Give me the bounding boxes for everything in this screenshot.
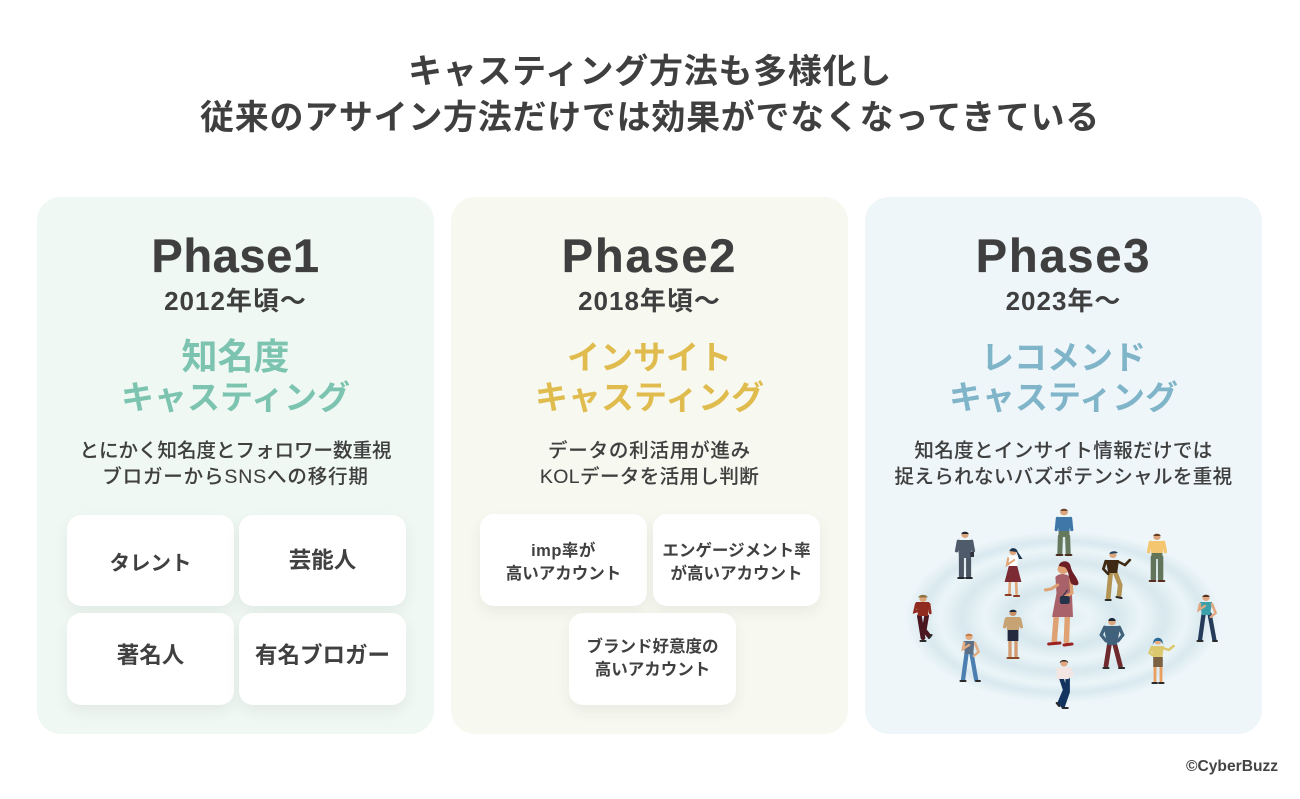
card: engagement rate: エンゲージメント率: [662, 542, 811, 560]
description: phase 1: とにかく知名度とフォロワー数重視: [79, 440, 392, 462]
card: brand favorability: 高いアカウント: [595, 661, 710, 679]
subheading: recommend casting: キャスティング: [949, 371, 1178, 419]
person: woman in red skirt: [1005, 548, 1023, 596]
heading: Phase3: Phase3: [976, 229, 1151, 282]
description: phase 3: 知名度とインサイト情報だけでは: [914, 440, 1213, 462]
subheading: insight casting: インサイト: [567, 331, 732, 379]
ripple rings: [905, 531, 1221, 703]
person: blue shirt: [1056, 509, 1072, 555]
description: phase 3: 捉えられないバズポテンシャルを重視: [895, 466, 1232, 488]
title: [200, 44, 1100, 139]
card: celebrity: 著名人: [117, 643, 184, 668]
person: teal shirt: [1198, 595, 1217, 641]
person: tan shirt and shorts: [1005, 610, 1021, 658]
title: キャスティング方法も多様化し: [408, 44, 892, 93]
person: white shirt navy pants: [1057, 660, 1072, 708]
subheading: insight casting: キャスティング: [535, 371, 764, 419]
heading: Phase2: Phase2: [562, 229, 737, 282]
description: phase 2: KOLデータを活用し判断: [540, 466, 759, 488]
subheading: fame casting: [121, 328, 350, 419]
card: entertainer: 芸能人: [289, 548, 356, 572]
description: phase 1: ブロガーからSNSへの移行期: [102, 466, 369, 488]
person: suit: [957, 532, 974, 578]
person: navy jacket maroon pants: [1101, 618, 1124, 668]
heading: Phase1: Phase1: [151, 229, 320, 282]
card: engagement rate: [653, 514, 820, 606]
card: engagement rate: が高いアカウント: [670, 564, 802, 582]
panel: Phase 1: [37, 197, 434, 734]
subheading: fame casting: 知名度: [181, 328, 290, 380]
person: red shirt: [915, 595, 931, 641]
period: 2018: 2018年頃〜: [578, 286, 721, 316]
description: phase 1: [79, 440, 392, 488]
person: dark sweater khaki pants: [1103, 551, 1130, 600]
card: entertainer: [239, 515, 406, 606]
person: woman in yellow top: [1150, 638, 1174, 683]
copyright: ©CyberBuzz: [1186, 758, 1278, 775]
card: celebrity: [67, 613, 234, 705]
card: imp rate: 高いアカウント: [506, 564, 621, 582]
subheading: insight casting: [535, 331, 764, 419]
period: 2012: 2012年頃〜: [164, 286, 307, 316]
card: famous blogger: 有名ブロガー: [255, 643, 390, 668]
card: imp rate: imp率が: [531, 542, 596, 560]
card: talent: [67, 515, 234, 606]
description: phase 2: [540, 440, 759, 488]
subheading: recommend casting: [949, 331, 1178, 419]
description: phase 2: データの利活用が進み: [548, 440, 751, 462]
person: yellow shirt: [1149, 534, 1165, 581]
period: 2023: 2023年〜: [1006, 286, 1121, 316]
card: famous blogger: [239, 613, 406, 705]
card: brand favorability: ブランド好意度の: [586, 638, 718, 656]
title: 従来のアサイン方法だけでは効果がでなくなってきている: [200, 90, 1100, 139]
description: phase 3: [895, 440, 1232, 488]
illustration: people around an influencer: [912, 508, 1218, 709]
card: imp rate: [480, 514, 647, 606]
panel: Phase 2: [451, 197, 848, 734]
subheading: recommend casting: レコメンド: [981, 331, 1146, 379]
panel: Phase 3: [865, 197, 1262, 734]
person: central woman: [1046, 561, 1078, 645]
card: brand favorability: [569, 613, 736, 705]
subheading: fame casting: キャスティング: [121, 371, 350, 419]
card: talent: タレント: [110, 552, 192, 574]
person: blue jeans: [961, 634, 980, 681]
